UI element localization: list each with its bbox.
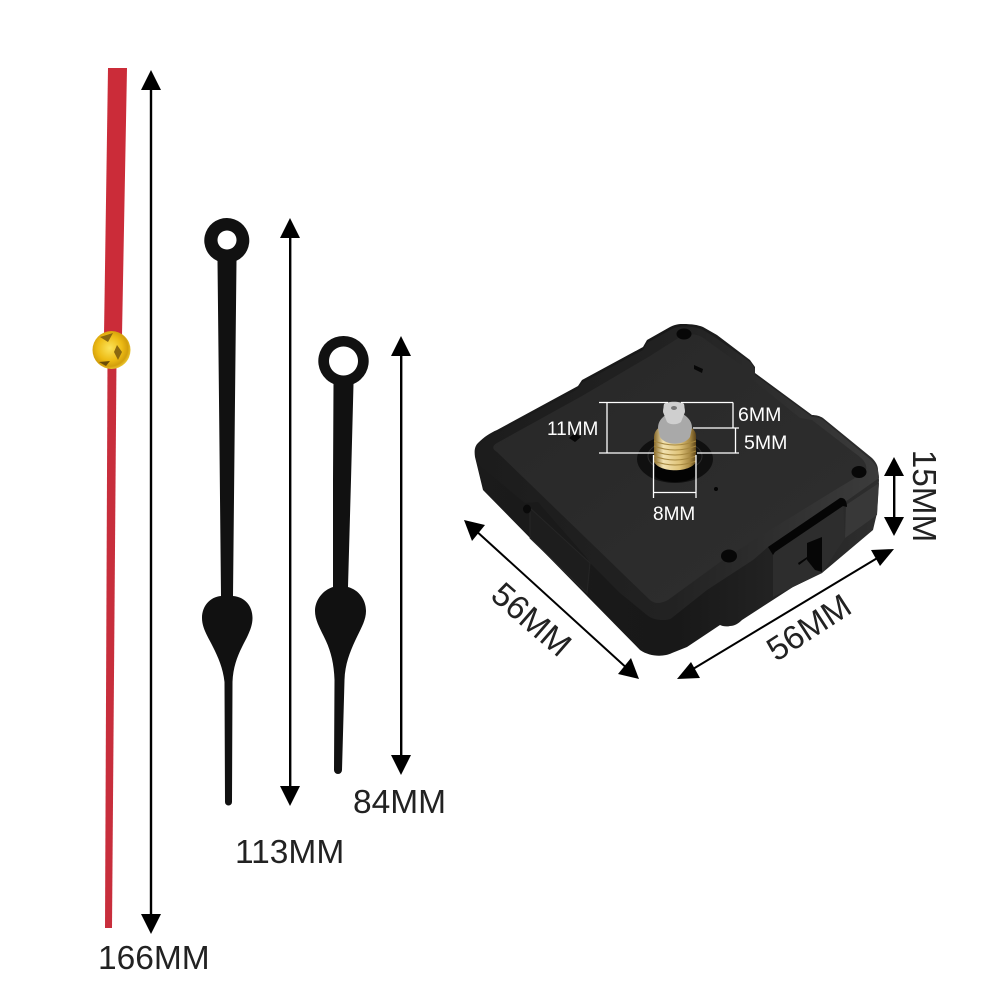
- washer: [637, 435, 713, 483]
- screw hole right: [852, 466, 866, 478]
- movement top rim: [476, 326, 879, 620]
- minute hand: [315, 336, 369, 774]
- hour hand: [202, 218, 252, 806]
- arrow: 15MM: [884, 457, 904, 536]
- arrow: right 56MM: [677, 549, 894, 679]
- label: 8MM: 8MM: [653, 504, 695, 525]
- screw hole bottom: [721, 550, 737, 562]
- icon: gold bead: [92, 331, 130, 369]
- arrow: left 56MM: [464, 520, 639, 679]
- arrow: 166MM: [141, 70, 161, 934]
- label: 113MM: 113MM: [235, 834, 344, 871]
- clock movement: [475, 324, 879, 656]
- switch slider: [768, 483, 879, 597]
- label: left 56MM: 56MM: [484, 576, 578, 664]
- screw hole top: [676, 328, 692, 340]
- movement body: [475, 324, 879, 656]
- grey plastic spindle: [658, 402, 692, 444]
- diamond hole: [569, 433, 581, 442]
- label: 5MM: 5MM: [744, 432, 787, 454]
- label: 166MM: 166MM: [98, 940, 210, 977]
- arrow: 84MM: [391, 336, 411, 775]
- label: 11MM: 11MM: [547, 419, 598, 440]
- white dimension lines: [599, 402, 739, 498]
- side clip notch: [523, 504, 531, 514]
- red second hand: [92, 68, 130, 928]
- small pin hole: [714, 487, 718, 491]
- label: 84MM: 84MM: [353, 784, 446, 821]
- label: right 56MM: 56MM: [760, 587, 858, 669]
- side clip left: [530, 508, 590, 593]
- arrow: 113MM: [280, 218, 300, 806]
- inner recessed panel: [493, 334, 866, 603]
- label: 6MM: 6MM: [738, 404, 781, 426]
- slot: [694, 365, 703, 373]
- threaded brass post: [654, 424, 696, 470]
- label: 15MM: 15MM: [905, 450, 942, 542]
